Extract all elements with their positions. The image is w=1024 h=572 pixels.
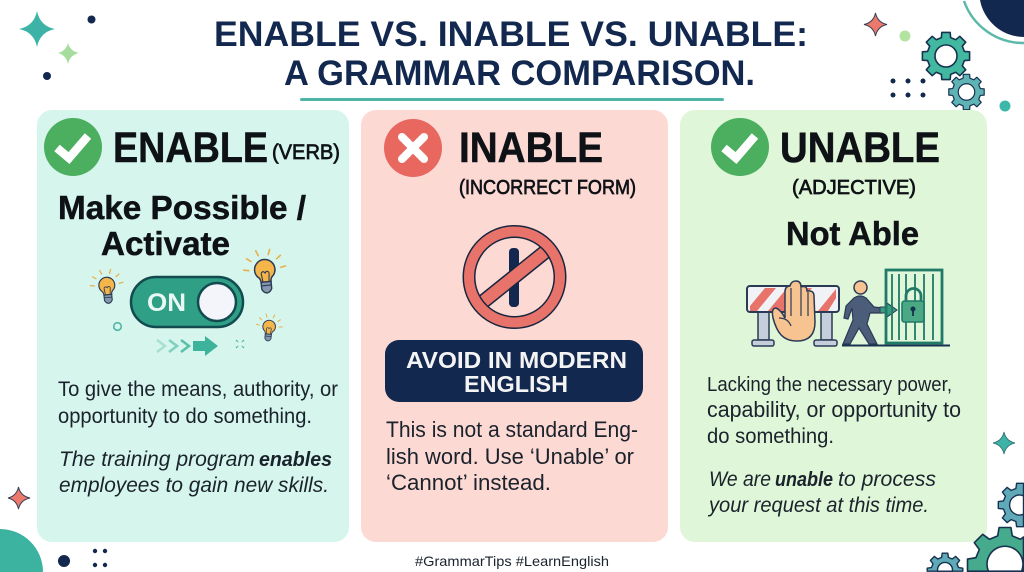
panel: enable [37,110,349,542]
definition text: unable: do something. [707,425,834,448]
title: A GRAMMAR COMPARISON. [284,54,755,93]
icon: left bulb [89,268,125,305]
definition text: enable [58,378,338,428]
decoration: bottom-left shapes [0,487,107,572]
title: ENABLE VS. INABLE VS. UNABLE: [214,15,808,54]
subheading: make possible: Activate [101,225,230,262]
subheading: make possible: Make Possible / [58,189,306,226]
icon: red cross [384,119,442,177]
icon: small bulb [255,313,283,342]
arrow: chevrons [157,336,218,356]
decoration: top-left sparkles and dots [19,11,96,80]
example text: unable [707,468,936,517]
sparkle marks [236,340,244,348]
icon: green check [711,118,769,176]
subheading: make possible [58,189,306,262]
definition text: unable: capability, or opportunity to [707,397,961,422]
example text: unable: unable [775,469,833,491]
panel background: unable [680,110,987,542]
part of speech: verb: (VERB) [272,141,340,164]
panel: unable [680,110,987,542]
definition text: inable: lish word. Use ‘Unable’ or [386,444,634,469]
footer hashtags: #GrammarTips #LearnEnglish [415,553,609,569]
icon: right bulb [242,248,288,295]
panel background: inable [361,110,668,542]
example text: enable: employees to gain new skills. [59,474,329,497]
badge: avoid in modern english: AVOID IN MODERN [406,347,627,373]
badge: avoid in modern english: ENGLISH [464,371,568,397]
icon: prohibited letter I [469,232,560,322]
icon: green check [44,118,102,176]
subheading: not able: Not Able [786,215,919,252]
title [214,15,808,93]
icon: barrier and stop hand [747,281,839,346]
decoration: bottom-right sparkle and gears [927,432,1024,571]
icon: on toggle: ON [147,289,186,317]
panel background: enable [37,110,349,542]
definition text: enable: To give the means, authority, or [58,378,338,401]
heading: inable: INABLE [459,124,603,172]
definition text: unable: Lacking the necessary power, [707,374,952,396]
example text: unable: your request at this time. [707,494,929,517]
definition text: inable: ‘Cannot’ instead. [386,470,551,495]
heading: enable: ENABLE [113,124,268,172]
icon: person walking toward locked gate [842,270,950,346]
example text: unable: We are [709,468,771,491]
hollow dot [114,323,121,330]
definition text: enable: opportunity to do something. [58,405,312,428]
title underline [300,98,724,101]
definition text: unable [707,374,961,448]
heading: unable: UNABLE [780,124,940,172]
decoration: top-right circles, gears and dots [864,0,1024,112]
example text: enable [59,448,332,497]
definition text: inable [386,417,638,495]
example text: enable: The training program [59,448,255,471]
part of speech: adjective: (ADJECTIVE) [792,177,916,199]
icon: on toggle [131,277,243,327]
label: incorrect form: (INCORRECT FORM) [459,177,636,199]
panel: inable [361,110,668,542]
example text: enable: enables [259,449,332,471]
example text: unable: to process [838,468,936,491]
definition text: inable: This is not a standard Eng- [386,417,638,442]
badge: avoid in modern english [385,340,643,402]
